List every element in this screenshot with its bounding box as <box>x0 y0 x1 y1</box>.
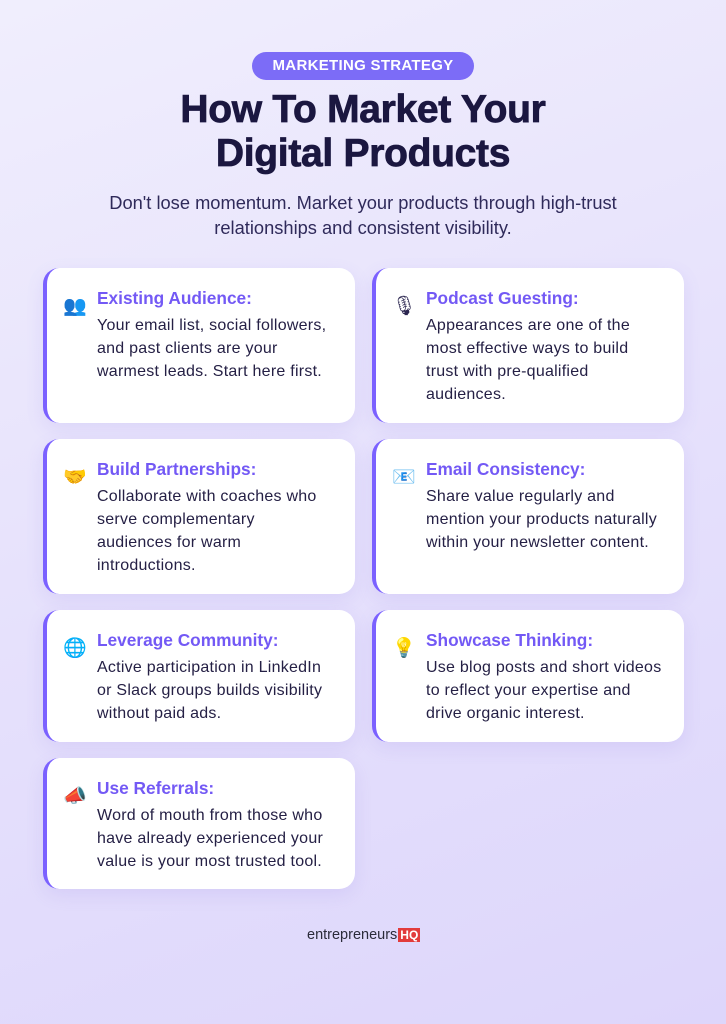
card: email consistency <box>372 439 684 594</box>
card: podcast guesting: Appearances are one of the <box>426 317 630 334</box>
card: podcast guesting <box>372 268 684 423</box>
card: showcase thinking: Use blog posts and short videos <box>426 659 661 676</box>
card: use referrals: Use Referrals: <box>97 778 214 798</box>
pill label <box>252 52 474 80</box>
title: Digital Products <box>216 132 510 175</box>
card: showcase thinking: to reflect your expertise and <box>426 682 631 699</box>
card: existing audience <box>43 268 355 423</box>
card: build partnerships: introductions. <box>97 557 196 574</box>
card: leverage community: without paid ads. <box>97 705 221 722</box>
card: podcast guesting: most effective ways to build <box>426 340 628 357</box>
card: build partnerships: Build Partnerships: <box>97 459 256 479</box>
card: build partnerships <box>43 439 355 594</box>
card: build partnerships: serve complementary <box>97 511 255 528</box>
subtitle <box>109 192 617 238</box>
card: build partnerships: 🤝 <box>63 466 87 488</box>
card: existing audience: 👥 <box>63 295 87 317</box>
card: leverage community: Leverage Community: <box>97 630 278 650</box>
card: podcast guesting: audiences. <box>426 386 506 403</box>
card: leverage community: 🌐 <box>63 637 87 659</box>
card: email consistency: Share value regularly and <box>426 488 615 505</box>
card: use referrals: value is your most trusted tool. <box>97 853 322 870</box>
card: podcast guesting: 🎙 <box>392 295 416 317</box>
subtitle: Don't lose momentum. Market your products through high-trust <box>109 192 617 213</box>
card: podcast guesting: trust with pre-qualified <box>426 363 589 380</box>
title: How To Market Your <box>180 88 546 131</box>
card: showcase thinking: 💡 <box>392 637 416 659</box>
card: existing audience: Your email list, social followers, <box>97 317 326 334</box>
pill label: MARKETING STRATEGY <box>273 57 453 74</box>
card: showcase thinking: Showcase Thinking: <box>426 630 593 650</box>
subtitle: relationships and consistent visibility. <box>214 217 512 238</box>
card: email consistency: 📧 <box>392 466 416 488</box>
card: leverage community: Active participation in LinkedIn <box>97 659 321 676</box>
card: showcase thinking <box>372 610 684 742</box>
card: use referrals <box>43 758 355 889</box>
card: email consistency: mention your products naturally <box>426 511 657 528</box>
title <box>180 88 546 175</box>
card: leverage community: or Slack groups builds visibility <box>97 682 322 699</box>
card: use referrals: have already experienced your <box>97 830 323 847</box>
card: build partnerships: Collaborate with coaches who <box>97 488 317 505</box>
card: existing audience: Existing Audience: <box>97 288 252 308</box>
card: existing audience: warmest leads. Start here first. <box>97 363 322 380</box>
logo: entrepreneursHQ <box>307 927 418 943</box>
card: existing audience: and past clients are your <box>97 340 278 357</box>
card: leverage community <box>43 610 355 742</box>
card: email consistency: within your newsletter content. <box>426 534 649 551</box>
card: showcase thinking: drive organic interest. <box>426 705 585 722</box>
card: email consistency: Email Consistency: <box>426 459 585 479</box>
card: use referrals: Word of mouth from those who <box>97 807 322 824</box>
card: use referrals: 📣 <box>63 785 87 807</box>
card: podcast guesting: Podcast Guesting: <box>426 288 579 308</box>
card: build partnerships: audiences for warm <box>97 534 241 551</box>
